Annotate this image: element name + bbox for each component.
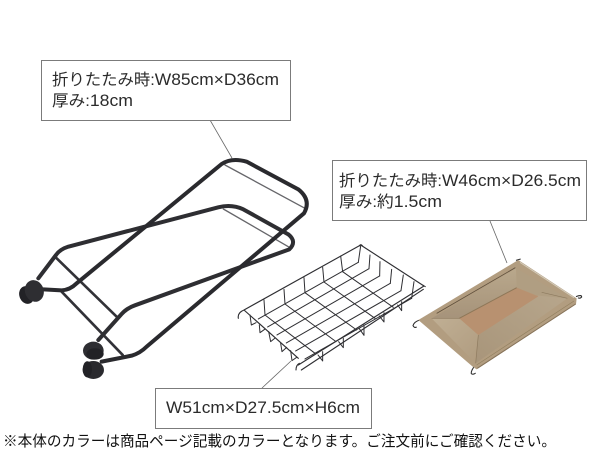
callout: basket size <box>156 388 372 428</box>
wire basket <box>238 245 425 370</box>
front edge shadow <box>477 304 576 368</box>
back uprights <box>264 256 343 315</box>
floor cross wires <box>265 272 393 353</box>
dark slot <box>437 268 515 313</box>
callout: frame size: 厚み:18cm <box>52 91 133 110</box>
callout: frame size <box>42 60 290 120</box>
callout: basket size: W51cm×D27.5cm×H6cm <box>166 398 360 417</box>
tray inner floor <box>459 288 538 335</box>
upper folded tube <box>43 160 307 362</box>
leader line: tray <box>490 221 507 263</box>
floor long wires <box>258 262 412 359</box>
leader line: basket <box>262 361 291 388</box>
callout: frame size: 折りたたみ時:W85cm×D36cm <box>52 70 279 89</box>
footnote: ※本体のカラーは商品ページ記載のカラーとなります。ご注文前にご確認ください。 <box>3 433 556 450</box>
leader line: frame <box>210 120 232 158</box>
front second edge <box>477 301 574 365</box>
inner floor shadow edge <box>459 288 517 318</box>
corner creases <box>432 292 567 363</box>
back-right wall <box>517 268 567 298</box>
hooks <box>413 259 582 374</box>
lower folded tube <box>38 206 293 340</box>
back-left wall <box>432 268 517 318</box>
fabric tray <box>413 259 582 374</box>
light top-right edge <box>520 262 574 298</box>
caster left <box>17 277 47 306</box>
callout: tray size: 折りたたみ時:W46cm×D26.5cm <box>339 171 581 190</box>
right uprights <box>358 246 414 298</box>
folded frame with casters <box>17 160 307 379</box>
front-left wall <box>432 318 478 362</box>
thin cross bars <box>223 165 305 247</box>
tray body <box>418 260 577 369</box>
front-right wall <box>476 296 567 363</box>
caster front lower <box>83 361 104 379</box>
tray base <box>418 260 577 369</box>
rim <box>238 245 424 365</box>
callout: tray size <box>332 160 586 220</box>
lower cross bars <box>57 258 123 355</box>
callout: tray size: 厚み:約1.5cm <box>339 192 442 211</box>
caster front upper <box>83 342 104 360</box>
front uprights <box>318 302 402 361</box>
hooks <box>359 245 425 287</box>
left legs <box>250 315 297 361</box>
front double rim <box>296 289 423 370</box>
